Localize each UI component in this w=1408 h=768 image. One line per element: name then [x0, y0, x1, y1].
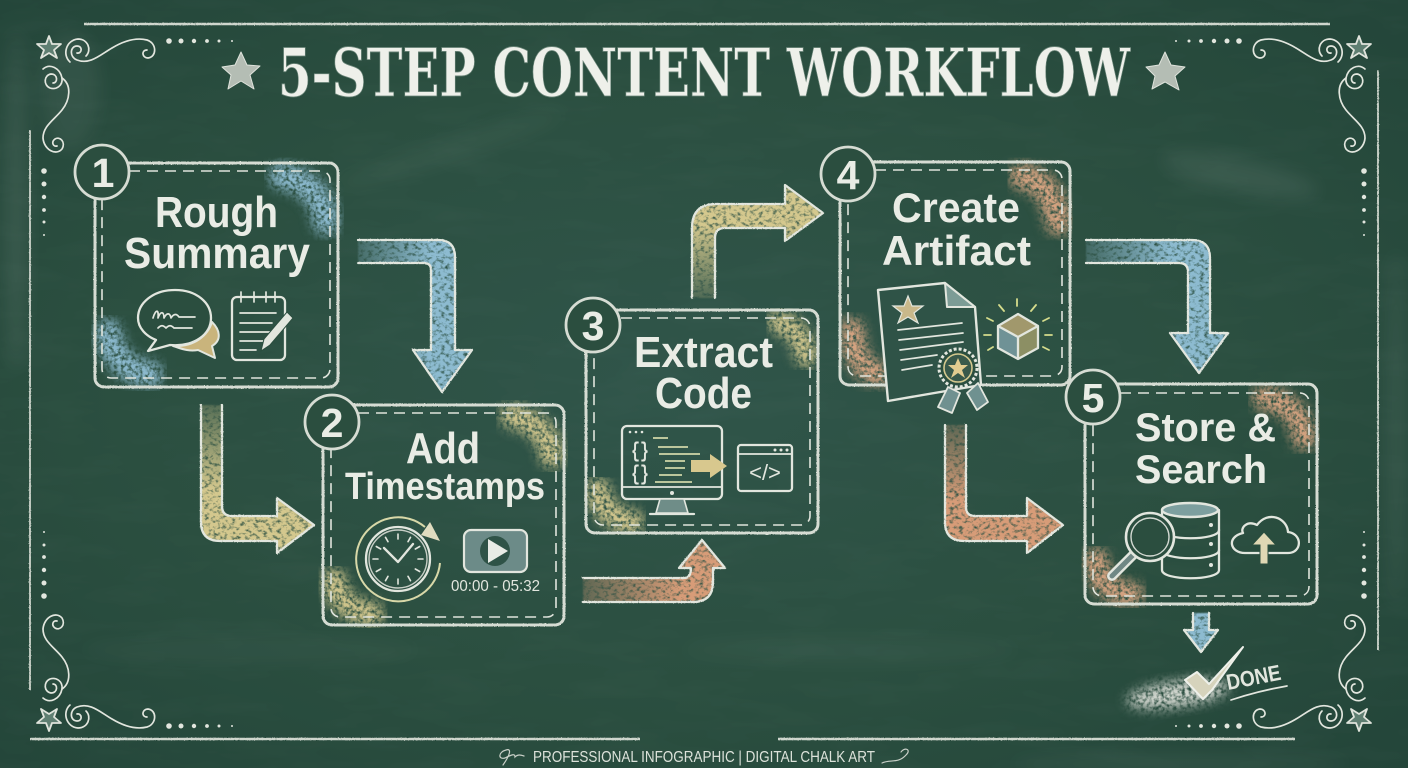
title star left	[222, 52, 260, 89]
corner ornament: top left	[37, 36, 233, 236]
panel: step 2 add timestamps: Add	[406, 424, 480, 473]
title: 5-STEP CONTENT WORKFLOW	[278, 34, 1131, 112]
arrow: step 4 to 5, blue	[1086, 240, 1228, 373]
icon: monitor with code: {}	[631, 464, 649, 487]
panel: step 1 rough summary: Summary	[124, 229, 310, 278]
arrow: step 3 to 4, yellow	[692, 185, 823, 298]
corner ornament: bottom left	[37, 531, 233, 731]
panel: step 2 add timestamps	[305, 395, 564, 625]
panel: step 3 extract code: Extract	[634, 328, 773, 377]
panel: step 5 store and search	[1066, 370, 1317, 604]
icon: database	[1162, 503, 1219, 578]
panel: step 1 rough summary: 1	[92, 150, 114, 196]
icon: code window	[738, 445, 792, 491]
panel: step 4 create artifact: 4	[837, 152, 860, 198]
panel: step 5 store and search: Search	[1135, 448, 1267, 492]
panel: step 4 create artifact	[821, 147, 1070, 413]
icon: notepad and pencil	[232, 292, 293, 360]
arrow: step 1 to 2, yellow	[201, 405, 314, 553]
panel: step 1 rough summary: Rough	[155, 188, 278, 237]
panel: step 4 create artifact: Create	[892, 184, 1020, 231]
icon: magnifying glass	[1112, 513, 1174, 576]
panel: step 2 add timestamps: 2	[321, 400, 343, 446]
icon: video play	[464, 530, 527, 572]
arrow: step 1 to 2, blue	[358, 240, 472, 392]
arrow: step 5 to done	[1184, 613, 1218, 652]
arrow: step 2 to 3, orange	[583, 540, 725, 602]
panel: step 3 extract code: Code	[655, 369, 752, 418]
panel: step 5 store and search: 5	[1082, 375, 1104, 421]
footer credit: PROFESSIONAL INFOGRAPHIC | DIGITAL CHALK ART	[533, 749, 875, 766]
icon: glowing cube	[984, 299, 1052, 359]
panel: step 4 create artifact: Artifact	[882, 227, 1031, 274]
icon: code window: </>	[749, 460, 781, 485]
corner ornament: top right	[1175, 36, 1371, 236]
icon: monitor with code: {}	[631, 441, 649, 464]
icon: speech bubbles	[138, 290, 219, 358]
panel: step 3 extract code	[566, 298, 818, 533]
icon: clock with circular arrow	[356, 517, 440, 601]
title star right	[1146, 52, 1185, 90]
panel: step 1 rough summary	[75, 145, 338, 387]
title: 5-STEP CONTENT WORKFLOW	[278, 34, 1131, 112]
timestamp label: 00:00 - 05:32	[451, 578, 540, 595]
icon: monitor with code	[622, 426, 727, 514]
corner ornament: bottom right	[1175, 531, 1371, 731]
icon: certificate document	[878, 283, 988, 413]
icon: cloud upload	[1232, 517, 1299, 564]
title underline	[288, 109, 1130, 111]
panel: step 2 add timestamps: Timestamps	[345, 466, 545, 508]
done check mark and label: DONE	[1224, 660, 1283, 695]
done check mark and label	[1125, 647, 1287, 714]
panel: step 3 extract code: 3	[582, 303, 604, 349]
arrow: step 4 to 5, orange	[945, 425, 1063, 553]
panel: step 5 store and search: Store &	[1135, 406, 1276, 450]
